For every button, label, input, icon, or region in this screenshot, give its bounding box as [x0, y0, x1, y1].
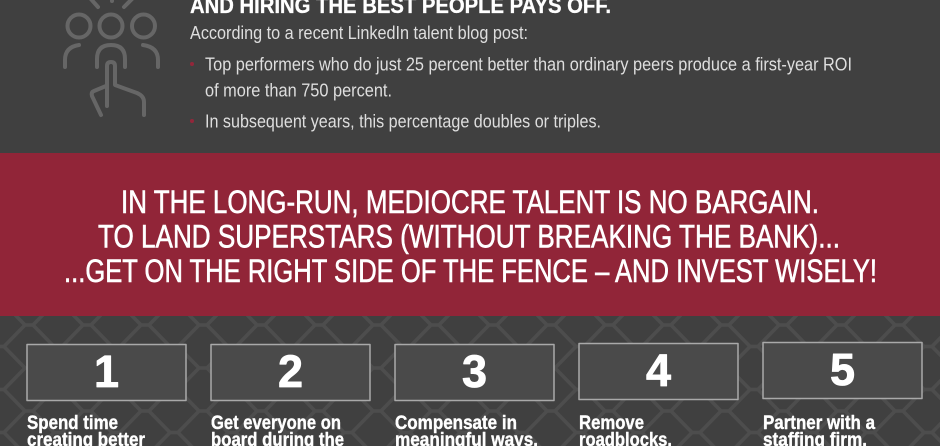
step 3: Compensate in: [395, 412, 517, 434]
step 5: [763, 342, 922, 446]
step 2: [211, 344, 370, 446]
panel: red banner: [0, 153, 940, 316]
step 1: [27, 344, 186, 446]
step 2: 2: [278, 346, 303, 397]
bullet list: of more than 750 percent.: [205, 80, 392, 100]
panel: fence-patterned steps section: [0, 316, 940, 446]
step 4: Remove: [579, 412, 644, 434]
step 3: 3: [462, 346, 487, 397]
step 1: 1: [94, 346, 119, 397]
bullet list: In subsequent years, this percentage doubles or triples.: [205, 110, 601, 132]
step 5: 5: [830, 344, 855, 395]
step 4: 4: [646, 345, 671, 396]
bullet list: Top performers who do just 25 percent better than ordinary peers produce a first-year ROI: [205, 54, 852, 74]
intro text: According to a recent LinkedIn talent blog post:: [190, 22, 528, 43]
step 5: Partner with a: [763, 412, 875, 434]
step 4: [579, 344, 738, 446]
step 3: [395, 344, 554, 446]
step 2: Get everyone on: [211, 412, 341, 434]
banner text: [64, 184, 877, 289]
bullet list: [190, 54, 852, 132]
step 1: Spend time: [27, 412, 118, 434]
panel: top dark section: [0, 0, 940, 153]
icon: hand pointing at three people: [65, 0, 158, 115]
